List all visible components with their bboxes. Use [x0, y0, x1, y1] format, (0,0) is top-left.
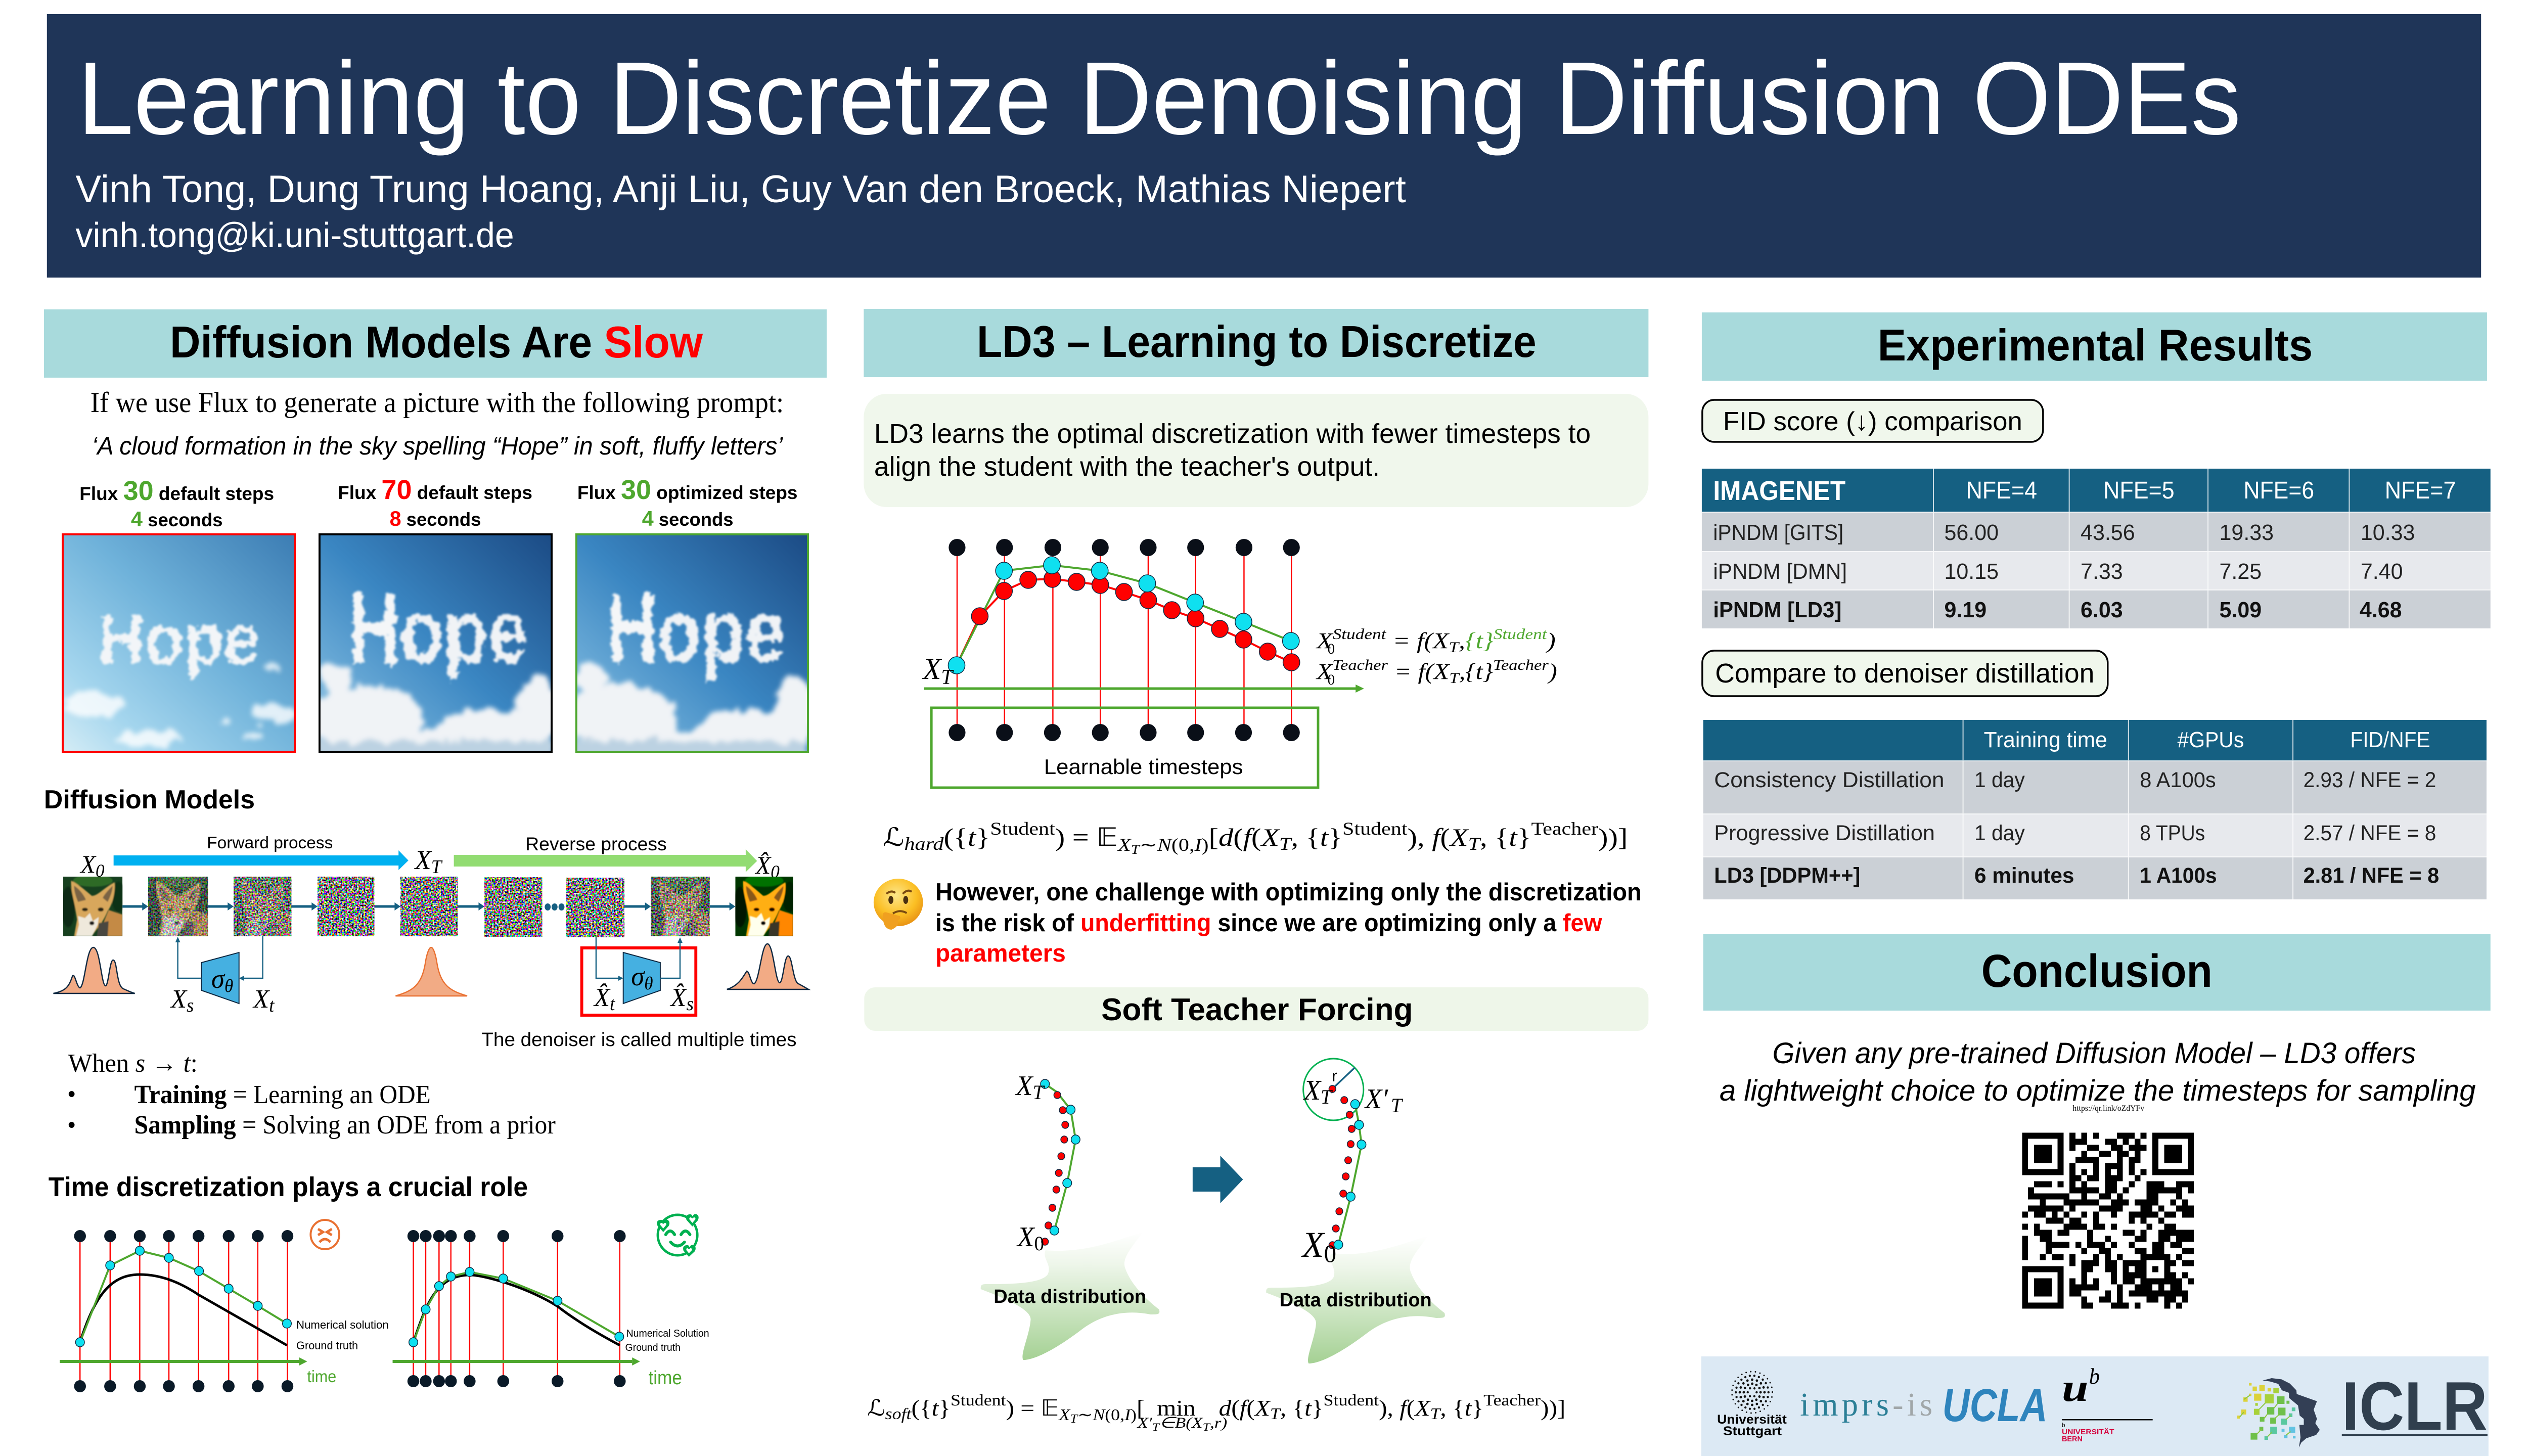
icon: thinking face: [874, 879, 923, 930]
chart: student and teacher trajectories: T: [941, 665, 954, 689]
formula: hard loss: Teacher: [1531, 818, 1598, 839]
formula: soft loss: ({: [912, 1396, 932, 1421]
table: distillation comparison: 1 day: [1974, 822, 2025, 845]
denoiser right in red box: t: [610, 994, 616, 1015]
panel: Experimental Results: [1702, 312, 2491, 899]
formula: hard loss: [d(f(X: [1209, 823, 1276, 851]
diagram: soft teacher forcing: T: [1391, 1095, 1404, 1117]
chart: student and teacher trajectories: Learnable timesteps: [1044, 755, 1243, 779]
formula: hard loss: , {t}: [1291, 823, 1340, 851]
caption: 30 optimized steps: [577, 475, 797, 530]
formula: hard loss: 𝔼: [1096, 822, 1118, 852]
header band: [47, 14, 2481, 278]
image: Hope cloud 30 optimized steps: H: [606, 570, 658, 686]
denoiser right in red box: s: [686, 994, 694, 1015]
arrow: forward process: [114, 833, 409, 870]
table: FID scores: 5.09: [2220, 598, 2262, 622]
caption: 30 default steps: [79, 476, 274, 531]
chart: optimized discretization: [393, 1230, 709, 1388]
icon: angry face: [310, 1220, 339, 1249]
table: FID scores: 7.33: [2081, 560, 2123, 584]
diagram: soft teacher forcing: X: [1304, 1074, 1321, 1106]
chart: student and teacher trajectories: [922, 539, 1364, 788]
icon: smiling face with hearts: [657, 1214, 699, 1257]
formula: soft loss: ℒ: [867, 1396, 885, 1421]
formula: soft loss: X: [1058, 1406, 1071, 1424]
logo: University of Bern: UNIVERSITÄT: [2062, 1428, 2114, 1436]
table: distillation comparison: 1 day: [1974, 768, 2025, 792]
chart: uniform discretization: Numerical solution: [296, 1318, 389, 1331]
image strip: fox to noise: [61, 875, 796, 937]
text: underfitting challenge: parameters: [935, 939, 1066, 967]
panel heading: Conclusion: [1981, 945, 2213, 997]
formula: hard loss: T: [1279, 834, 1292, 854]
formula: soft loss: , {t}: [1280, 1396, 1322, 1421]
logo: UCLA: UCLA: [1943, 1380, 2048, 1431]
image: Hope cloud 30 optimized steps: ope: [657, 581, 785, 681]
formula: soft loss: 𝔼: [1041, 1396, 1059, 1421]
density curve: data: [53, 947, 135, 993]
image: Hope cloud 30 default steps: Hope: [98, 600, 260, 679]
logo: University of Bern: [2062, 1364, 2153, 1443]
table: FID scores: IMAGENET: [1713, 476, 1846, 506]
logo: University of Bern: b: [2089, 1364, 2100, 1389]
diagram: hard teacher forcing: Data distribution: [994, 1286, 1146, 1307]
formula: hard loss: T: [1131, 842, 1141, 857]
label: FID comparison: FID score (↓) comparison: [1723, 406, 2022, 436]
table: distillation comparison: 2.81 / NFE = 8: [2304, 864, 2439, 888]
conclusion text: [1720, 1037, 2476, 1107]
label: compare to denoiser distillation: Compare to denoiser distillation: [1715, 658, 2094, 689]
text: underfitting challenge: [935, 878, 1642, 967]
diagram: hard teacher forcing: T: [1033, 1081, 1045, 1104]
image: Hope cloud 70 default steps: ope: [399, 581, 528, 681]
diagram: soft teacher forcing: r: [1332, 1067, 1337, 1085]
logo: University of Bern: b: [2062, 1422, 2065, 1429]
diagram: soft teacher forcing: 0: [1324, 1239, 1336, 1267]
formula: student and teacher outputs: T: [1449, 640, 1460, 656]
table: FID scores: iPNDM [DMN]: [1713, 560, 1847, 584]
formula: soft loss: ∼N(0,I): [1077, 1406, 1136, 1424]
chart: uniform discretization: Ground truth: [296, 1339, 358, 1352]
text: training and sampling: Sampling = Solving an ODE from a prior: [134, 1110, 556, 1140]
table: distillation comparison: 2.93 / NFE = 2: [2304, 768, 2436, 792]
callout: LD3 description: [864, 394, 1648, 507]
label: compare to denoiser distillation: [1702, 651, 2108, 696]
math labels: X: [80, 850, 96, 878]
text: training and sampling: [68, 1049, 556, 1140]
diagram: hard teacher forcing: X: [1016, 1070, 1033, 1101]
panel: LD3 Learning to Discretize: [864, 309, 1648, 1433]
subheading: Diffusion Models: Diffusion Models: [44, 784, 255, 814]
diagram: hard teacher forcing: X: [1017, 1221, 1034, 1252]
denoiser left: σ: [211, 963, 224, 994]
table: distillation comparison: [1703, 720, 2487, 899]
panel: Conclusion: [1703, 934, 2491, 1308]
contact email: vinh.tong@ki.uni-stuttgart.de: [75, 215, 514, 255]
denoiser right in red box: [582, 937, 696, 1015]
table: FID scores: 56.00: [1944, 521, 1999, 545]
formula: hard loss: , {t}: [1480, 823, 1529, 851]
chart: student and teacher trajectories: X: [923, 652, 941, 686]
formula: student and teacher outputs: 0: [1328, 641, 1335, 657]
table: FID scores: 6.03: [2081, 598, 2123, 622]
denoiser left: X: [171, 984, 187, 1014]
formula: student and teacher outputs: ,: [1459, 629, 1465, 653]
formula: soft loss: [867, 1391, 1565, 1433]
formula: student and teacher outputs: Student: [1494, 626, 1547, 643]
logo: University of Stuttgart: Stuttgart: [1723, 1425, 1782, 1438]
logo: University of Bern: BERN: [2062, 1435, 2083, 1443]
arrow: reverse process: [454, 834, 757, 872]
QR code: [2022, 1132, 2194, 1308]
formula: student and teacher outputs: ,{t}: [1459, 660, 1493, 684]
formula: student and teacher outputs: Student: [1333, 626, 1386, 643]
table: distillation comparison: LD3 [DDPM++]: [1714, 864, 1860, 888]
table: FID scores: NFE=7: [2385, 477, 2456, 504]
table: distillation comparison: #GPUs: [2178, 728, 2244, 752]
denoiser left: X: [253, 984, 269, 1014]
denoiser left: t: [269, 995, 275, 1016]
formula: soft loss: ,r): [1210, 1415, 1227, 1431]
math labels: X̂: [755, 851, 771, 879]
formula: student and teacher outputs: Teacher: [1332, 657, 1388, 673]
table: FID scores: iPNDM [LD3]: [1713, 598, 1841, 622]
image: Hope cloud 30 optimized steps: [575, 533, 809, 753]
formula: soft loss: Student: [1324, 1391, 1379, 1409]
intro sentence: If we use Flux to generate a picture with the following prompt:: [91, 387, 784, 419]
formula: soft loss: Student: [951, 1391, 1006, 1409]
caption: 70 default steps: [338, 475, 532, 530]
math labels: [79, 844, 780, 882]
diagram: soft teacher forcing: T: [1321, 1086, 1333, 1108]
conclusion text: Given any pre-trained Diffusion Model – LD3 offers: [1773, 1037, 2416, 1070]
table: distillation comparison: 1 A100s: [2140, 864, 2217, 888]
formula: soft loss: ), f(X: [1379, 1396, 1428, 1421]
panel heading: Experimental Results: [1878, 321, 2313, 370]
diagram: forward and reverse process: [53, 833, 808, 1050]
formula: soft loss: T: [1152, 1421, 1160, 1433]
formula: hard loss: ))]: [1598, 823, 1628, 851]
formula: soft loss: T: [1203, 1421, 1211, 1433]
panel heading: [1703, 934, 2491, 1011]
formula: soft loss: T: [1430, 1405, 1441, 1423]
table: FID scores: 9.19: [1944, 598, 1987, 622]
caption: 30 optimized steps: Flux 30 optimized steps: [577, 475, 797, 505]
formula: hard loss: X: [1117, 835, 1132, 855]
logo: ICLR head: [2237, 1378, 2320, 1447]
caption: 30 default steps: Flux 30 default steps: [79, 476, 274, 506]
logo strip: [1701, 1356, 2489, 1456]
table: distillation comparison: Progressive Distillation: [1714, 822, 1935, 845]
table: FID scores: 10.33: [2361, 521, 2415, 545]
chart: uniform discretization: [60, 1230, 389, 1392]
table: FID scores: NFE=5: [2103, 477, 2175, 504]
formula: student and teacher outputs: [1316, 626, 1557, 688]
image: Hope cloud 30 default steps: [62, 533, 296, 753]
denoiser right in red box: σ: [631, 961, 644, 991]
panel heading: Diffusion Models Are Slow: [170, 317, 703, 367]
text: underfitting challenge: However, one challenge with optimizing only the discretization: [935, 878, 1642, 906]
arrow: reverse process: Reverse process: [525, 834, 667, 854]
chart: optimized discretization: Ground truth: [625, 1342, 681, 1353]
subheading: Soft Teacher Forcing: [864, 987, 1648, 1031]
formula: soft loss: , {t}: [1440, 1396, 1482, 1421]
formula: soft loss: ))]: [1541, 1396, 1565, 1421]
diagram: soft teacher forcing: X: [1302, 1225, 1324, 1265]
table: FID scores: 43.56: [2081, 521, 2135, 545]
math labels: T: [431, 857, 443, 878]
formula: soft loss: t}: [932, 1396, 949, 1421]
logo: University of Bern: u: [2062, 1366, 2089, 1409]
process arrows: [122, 902, 735, 911]
table: FID scores: 10.15: [1944, 560, 1999, 584]
table: distillation comparison: 8 A100s: [2140, 768, 2216, 792]
formula: student and teacher outputs: ): [1545, 629, 1556, 653]
table: FID scores: 7.25: [2220, 560, 2262, 584]
formula: hard loss: ), f(X: [1408, 823, 1465, 851]
panel heading: [1702, 312, 2487, 381]
text: training and sampling: When s → t:: [68, 1049, 198, 1078]
table: distillation comparison: Training time: [1984, 728, 2107, 752]
formula: student and teacher outputs: T: [1449, 670, 1460, 687]
table: FID scores: iPNDM [GITS]: [1713, 521, 1843, 545]
label: FID comparison: [1702, 400, 2043, 442]
formula: hard loss: Student: [990, 818, 1055, 839]
formula: hard loss: hard: [905, 834, 944, 854]
caption: 70 default steps: Flux 70 default steps: [338, 475, 532, 505]
formula: student and teacher outputs: X: [1317, 660, 1330, 684]
density curve: generated: [727, 944, 808, 989]
formula: student and teacher outputs: Teacher: [1493, 657, 1549, 673]
callout: LD3 description: LD3 learns the optimal discretization with fewer timesteps to: [874, 419, 1591, 449]
image: Hope cloud 70 default steps: H: [349, 570, 400, 686]
panel heading: [44, 309, 827, 378]
text: training and sampling: Training = Learning an ODE: [134, 1080, 431, 1109]
formula: student and teacher outputs: = f(X: [1388, 660, 1450, 684]
formula: soft loss: T: [1270, 1405, 1282, 1423]
formula: soft loss: ∈B(X: [1159, 1415, 1204, 1431]
denoiser left: θ: [224, 976, 233, 996]
formula: student and teacher outputs: = f(X: [1386, 629, 1450, 653]
density curve: gaussian prior: [395, 947, 467, 996]
chart: uniform discretization: time: [307, 1367, 336, 1386]
logo: University of Stuttgart: [1717, 1372, 1787, 1438]
arrow: hard to soft: [1193, 1156, 1243, 1203]
formula: soft loss: X′: [1137, 1415, 1150, 1431]
subheading: Soft Teacher Forcing: Soft Teacher Forcing: [1101, 992, 1413, 1027]
prompt text: ‘A cloud formation in the sky spelling “Hope” in soft, fluffy letters’: [92, 432, 783, 460]
math labels: X: [415, 844, 431, 875]
panel heading: LD3 – Learning to Discretize: [977, 317, 1537, 367]
chart: optimized discretization: time: [648, 1367, 682, 1388]
math labels: 0: [771, 861, 780, 882]
title: Learning to Discretize Denoising Diffusion ODEs: [77, 40, 2241, 156]
table: FID scores: NFE=6: [2243, 477, 2314, 504]
denoiser right in red box: X̂: [594, 983, 610, 1012]
panel: Diffusion Models Are Slow: [44, 309, 827, 1392]
table: distillation comparison: 6 minutes: [1974, 864, 2074, 888]
formula: hard loss: T: [1468, 834, 1481, 854]
table: distillation comparison: FID/NFE: [2350, 728, 2430, 752]
caption: 30 optimized steps: 4 seconds: [642, 507, 733, 530]
arrow: forward process: Forward process: [207, 833, 333, 852]
table: FID scores: 19.33: [2220, 521, 2274, 545]
formula: hard loss: Student: [1342, 818, 1408, 839]
diagram: hard teacher forcing: [981, 1070, 1159, 1360]
formula: soft loss: ) =: [1006, 1396, 1041, 1421]
formula: student and teacher outputs: 0: [1328, 672, 1335, 688]
diagram: soft teacher forcing: [1266, 1059, 1445, 1363]
denoiser left: [170, 936, 275, 1016]
panel heading: [864, 309, 1648, 377]
denoiser left: s: [187, 995, 194, 1016]
subheading: time discretization: Time discretization plays a crucial role: [49, 1172, 528, 1202]
authors: Vinh Tong, Dung Trung Hoang, Anji Liu, Guy Van den Broeck, Mathias Niepert: [75, 167, 1406, 210]
table: FID scores: [1702, 469, 2491, 628]
image: Hope cloud 70 default steps: [319, 533, 553, 753]
formula: hard loss: ({: [943, 823, 968, 851]
formula: soft loss: Teacher: [1483, 1391, 1541, 1409]
formula: hard loss: ∼N(0,I): [1140, 835, 1207, 855]
logo: ICLR: ICLR: [2342, 1368, 2488, 1444]
table: FID scores: NFE=4: [1966, 477, 2037, 504]
formula: soft loss: soft: [885, 1405, 912, 1423]
formula: hard loss: ) =: [1055, 823, 1096, 851]
formula: soft loss: T: [1070, 1413, 1078, 1426]
formula: hard loss: t}: [968, 823, 988, 851]
table: FID scores: 7.40: [2361, 560, 2403, 584]
denoiser right in red box: θ: [644, 973, 653, 993]
formula: student and teacher outputs: X: [1317, 629, 1330, 653]
caption: 70 default steps: 8 seconds: [390, 507, 481, 530]
table: distillation comparison: Consistency Distillation: [1714, 768, 1944, 792]
chart: optimized discretization: Numerical Solution: [626, 1328, 709, 1339]
formula: soft loss: [: [1137, 1396, 1145, 1421]
table: distillation comparison: 2.57 / NFE = 8: [2304, 822, 2436, 845]
table: distillation comparison: 8 TPUs: [2140, 822, 2205, 845]
formula: soft loss: min d(f(X: [1156, 1396, 1268, 1421]
logo: University of Stuttgart: Universität: [1717, 1413, 1787, 1427]
table: FID scores: 4.68: [2360, 598, 2402, 622]
text: underfitting challenge: is the risk of underfitting since we are optimizing only a few: [935, 909, 1602, 937]
logo: IMPRS-IS: imprs-is: [1800, 1386, 1932, 1423]
caption: denoiser: The denoiser is called multiple times: [481, 1029, 797, 1050]
formula: hard loss: ℒ: [883, 822, 905, 852]
QR link: https://qr.link/oZdYFv: [2072, 1104, 2144, 1113]
diagram: soft teacher forcing: Data distribution: [1280, 1289, 1432, 1310]
formula: student and teacher outputs: {t}: [1465, 629, 1494, 653]
diagram: hard teacher forcing: 0: [1034, 1233, 1044, 1255]
formula: student and teacher outputs: ): [1547, 660, 1557, 684]
math labels: 0: [96, 860, 105, 881]
denoiser right in red box: X̂: [670, 983, 686, 1012]
callout: LD3 description: align the student with the teacher's output.: [874, 451, 1380, 482]
diagram: soft teacher forcing: X′: [1365, 1083, 1388, 1114]
caption: 30 default steps: 4 seconds: [131, 507, 223, 531]
conclusion text: a lightweight choice to optimize the timesteps for sampling: [1720, 1074, 2476, 1107]
